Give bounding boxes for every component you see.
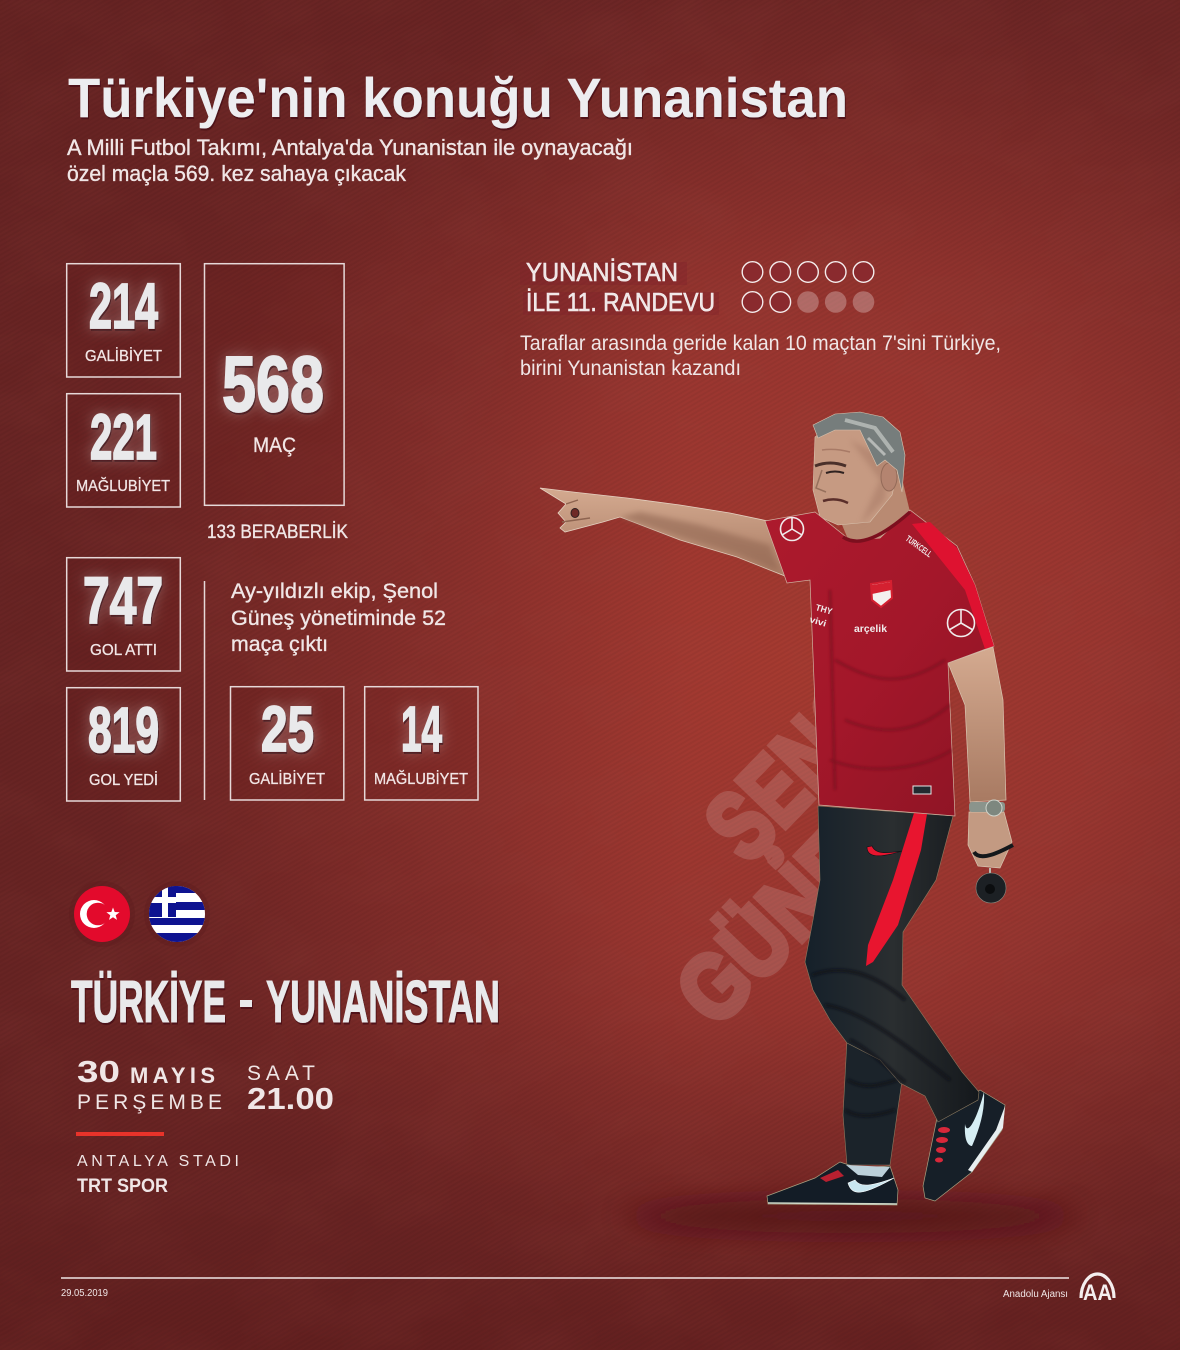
match time xyxy=(247,1062,334,1116)
back leg trouser xyxy=(843,1040,905,1165)
subtitle: A Milli Futbol Takımı, Antalya'da Yunanistan ile oynayacağı xyxy=(67,135,633,160)
stat box: 747 gol attı: 747 xyxy=(83,563,163,637)
heading: 11th meeting with Greece: İLE 11. RANDEVU xyxy=(526,287,715,317)
mercedes logo right sleeve xyxy=(948,610,974,636)
stat box: 568 maç xyxy=(204,264,344,505)
stat box: 747 gol attı xyxy=(67,558,180,671)
stat box: 14 mağlubiyet xyxy=(365,687,478,800)
match time: 21.00 xyxy=(247,1081,334,1116)
match heading xyxy=(71,969,500,1035)
stat box: 221 mağlubiyet: MAĞLUBİYET xyxy=(76,476,170,495)
flag: Turkey xyxy=(69,881,135,947)
trousers xyxy=(805,806,979,1122)
flag: Greece xyxy=(149,886,205,942)
trouser stripe xyxy=(866,813,927,966)
agency name: Anadolu Ajansı xyxy=(1003,1289,1068,1300)
watermark: Şenol Güneş xyxy=(657,624,937,1044)
match date: 30 xyxy=(77,1054,120,1089)
sponsor marks: vivi xyxy=(808,614,828,629)
stat box: 214 galibiyet: GALİBİYET xyxy=(85,346,162,365)
pointing arm xyxy=(540,488,790,578)
broadcaster: TRT SPOR xyxy=(77,1176,168,1197)
meeting description: birini Yunanistan kazandı xyxy=(520,357,741,380)
draws label: 133 BERABERLİK xyxy=(207,522,348,543)
sponsor marks: TURKCELL xyxy=(904,534,934,559)
watermark: Şenol Güneş: ŞENOL xyxy=(684,624,937,881)
left shoe xyxy=(767,1162,898,1205)
mercedes logo left sleeve xyxy=(780,518,804,540)
collar xyxy=(843,512,910,541)
stat box: 819 gol yedi: 819 xyxy=(88,694,159,766)
stat box: 25 galibiyet: GALİBİYET xyxy=(249,769,325,788)
watch xyxy=(969,800,1005,816)
ground shadow xyxy=(625,1199,1075,1233)
trouser folds xyxy=(812,970,950,1116)
shirt folds xyxy=(830,590,952,790)
stat box: 819 gol yedi xyxy=(67,688,180,801)
stat box: 25 galibiyet xyxy=(230,687,344,800)
icon: Anadolu Agency logo: AA xyxy=(1083,1280,1112,1305)
match heading: TÜRKİYE xyxy=(71,969,226,1035)
nike swoosh xyxy=(867,846,902,856)
heading: 11th meeting with Greece xyxy=(520,257,719,317)
subtitle xyxy=(67,135,633,186)
right arm xyxy=(948,647,1006,802)
stat box: 221 mağlubiyet: 221 xyxy=(90,401,157,473)
sponsor marks xyxy=(808,534,934,794)
Şenol Güneş record text: Ay-yıldızlı ekip, Şenol xyxy=(231,579,438,603)
date stamp: 29.05.2019 xyxy=(61,1288,108,1299)
meeting description: Taraflar arasında geride kalan 10 maçtan 7'sini Türkiye, xyxy=(520,332,1001,355)
venue: ANTALYA STADI xyxy=(77,1153,239,1170)
match time: SAAT xyxy=(247,1062,315,1085)
Şenol Güneş record text xyxy=(231,579,446,656)
coach figure xyxy=(540,412,1013,1205)
stat box: 14 mağlubiyet: MAĞLUBİYET xyxy=(374,769,468,788)
Şenol Güneş record text: maça çıktı xyxy=(231,632,328,656)
stat box: 568 maç: MAÇ xyxy=(253,434,296,457)
stat box: 214 galibiyet: 214 xyxy=(89,270,158,342)
right hand xyxy=(968,812,1012,868)
whistle xyxy=(974,845,1013,903)
match date: PERŞEMBE xyxy=(77,1091,222,1114)
meeting description xyxy=(520,332,1001,380)
subtitle: özel maçla 569. kez sahaya çıkacak xyxy=(67,161,407,186)
shirt badge xyxy=(871,581,892,607)
stat box: 14 mağlubiyet: 14 xyxy=(401,693,442,765)
shirt sleeve stripe xyxy=(912,522,994,649)
match heading: YUNANİSTAN xyxy=(266,969,500,1035)
match date xyxy=(77,1054,222,1114)
neck and head xyxy=(813,412,910,544)
stat box: 747 gol attı: GOL ATTI xyxy=(90,642,157,659)
meeting tracker dots xyxy=(742,262,874,313)
sponsor marks: arçelik xyxy=(854,624,887,635)
stat box: 221 mağlubiyet xyxy=(67,394,180,507)
stat box: 819 gol yedi: GOL YEDİ xyxy=(89,770,158,789)
shirt xyxy=(765,510,994,816)
Şenol Güneş record text: Güneş yönetiminde 52 xyxy=(231,606,446,630)
right shoe xyxy=(923,1090,1005,1201)
match date: MAYIS xyxy=(130,1063,215,1088)
sponsor marks: THY xyxy=(814,602,834,617)
stat box: 214 galibiyet xyxy=(67,264,180,377)
stat box: 25 galibiyet: 25 xyxy=(261,693,314,765)
title: Türkiye'nin konuğu Yunanistan xyxy=(68,66,848,129)
stat box: 568 maç: 568 xyxy=(222,339,324,428)
heading: 11th meeting with Greece: YUNANİSTAN xyxy=(526,257,678,287)
watermark: Şenol Güneş: GÜNEŞ xyxy=(657,772,925,1044)
